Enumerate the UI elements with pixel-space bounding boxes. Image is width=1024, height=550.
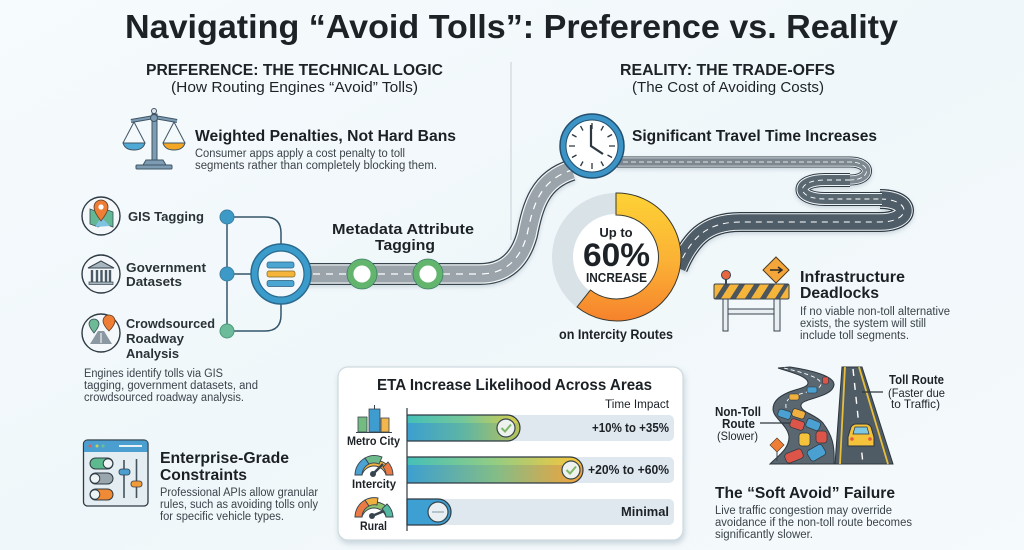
donut chart: up to 60%: INCREASE [586, 270, 647, 285]
label: significant travel time increases: Significant Travel Time Increases [632, 128, 877, 145]
label: crowdsourced roadway analysis [126, 316, 215, 361]
label: non-toll route: Route [722, 417, 755, 431]
label: on intercity routes: on Intercity Routes [559, 327, 673, 342]
text block: engines identify tolls: tagging, government datasets, and [84, 380, 258, 392]
text block: enterprise-grade constraints: rules, such as avoiding tolls only [160, 499, 318, 511]
text block: enterprise-grade constraints [160, 450, 318, 523]
column label: Time Impact [605, 399, 670, 411]
chart title: ETA Increase Likelihood Across Areas [377, 377, 652, 394]
icon: settings window [84, 440, 148, 506]
title: Navigating “Avoid Tolls”: Preference vs. Reality [125, 8, 899, 45]
chart axis [406, 408, 408, 531]
text block: infrastructure deadlocks: Infrastructure [800, 269, 905, 286]
icon: balance scales [123, 108, 185, 169]
text block: soft avoid failure: The “Soft Avoid” Failure [715, 485, 895, 502]
icon: metro city [347, 405, 401, 448]
text block: infrastructure deadlocks: Deadlocks [800, 285, 879, 302]
road: winding route [615, 162, 904, 268]
label: metadata attribute tagging [332, 222, 474, 254]
text block: weighted penalties: Consumer apps apply a cost penalty to toll [195, 148, 405, 160]
text block: infrastructure deadlocks: exists, the system will still [800, 318, 926, 330]
icon: rural gauge: Rural [360, 521, 387, 533]
label: government datasets: Datasets [126, 274, 182, 289]
heading: preference [146, 62, 443, 96]
bar: rural [407, 499, 674, 525]
icon: clock [560, 114, 624, 178]
label: crowdsourced roadway analysis: Roadway [126, 331, 185, 346]
heading: reality: REALITY: THE TRADE-OFFS [620, 62, 835, 79]
icon: GIS map pin [82, 197, 120, 235]
road markers [347, 259, 443, 289]
icon: intercity gauge [352, 456, 397, 491]
text block: soft avoid failure: avoidance if the non-toll route becomes [715, 517, 912, 529]
illustration: non-toll route with traffic [770, 367, 834, 464]
label: non-toll route: (Slower) [717, 429, 758, 443]
text block: weighted penalties [195, 128, 456, 172]
heading: preference: PREFERENCE: THE TECHNICAL LOGIC [146, 62, 443, 79]
icon: crowdsourced road [82, 314, 120, 352]
label: toll route: (Faster due [888, 386, 945, 400]
label: crowdsourced roadway analysis: Crowdsourced [126, 316, 215, 331]
icon: intercity gauge: Intercity [352, 479, 397, 491]
icon: rural gauge [355, 498, 393, 533]
bar: intercity [407, 457, 674, 483]
icon: road barrier [714, 257, 789, 331]
donut chart: up to 60%: Up to [599, 225, 633, 240]
donut chart: up to 60%: 60% [583, 237, 650, 273]
label: government datasets [126, 260, 207, 289]
label: toll route: Toll Route [889, 373, 944, 387]
text block: enterprise-grade constraints: Constraints [160, 467, 247, 484]
label: metadata attribute tagging: Tagging [375, 238, 435, 254]
text block: infrastructure deadlocks: If no viable non-toll alternative [800, 306, 950, 318]
heading: preference: (How Routing Engines “Avoid” Tolls) [171, 79, 418, 96]
icon: metadata hub [251, 244, 311, 304]
label: non-toll route [715, 405, 790, 443]
label: GIS tagging: GIS Tagging [128, 209, 204, 224]
donut chart: up to 60% [562, 193, 681, 321]
label: toll route [862, 373, 945, 411]
text block: engines identify tolls [84, 368, 258, 404]
label: non-toll route: Non-Toll [715, 405, 761, 419]
heading: reality [620, 62, 835, 96]
text block: infrastructure deadlocks: include toll segments. [800, 330, 909, 342]
bar: intercity: +20% to +60% [588, 462, 669, 477]
label: crowdsourced roadway analysis: Analysis [126, 346, 179, 361]
connector nodes [220, 210, 281, 338]
text block: engines identify tolls: crowdsourced roadway analysis. [84, 392, 244, 404]
text block: enterprise-grade constraints: Professional APIs allow granular [160, 487, 318, 499]
label: toll route: to Traffic) [891, 397, 940, 411]
label: metadata attribute tagging: Metadata Attribute [332, 222, 474, 238]
icon: government building [82, 255, 120, 293]
icon: metro city: Metro City [347, 436, 401, 448]
bar: metro city [407, 415, 674, 441]
illustration: toll route [835, 367, 893, 464]
heading: reality: (The Cost of Avoiding Costs) [632, 79, 824, 96]
text block: engines identify tolls: Engines identify tolls via GIS [84, 368, 223, 380]
text block: enterprise-grade constraints: Enterprise-Grade [160, 450, 289, 467]
text block: infrastructure deadlocks [800, 269, 950, 342]
bar: rural: Minimal [621, 504, 669, 519]
road: hub to clock [300, 170, 572, 274]
text block: weighted penalties: Weighted Penalties, Not Hard Bans [195, 128, 456, 145]
label: government datasets: Government [126, 260, 207, 275]
panel: ETA likelihood chart [338, 367, 683, 540]
text block: enterprise-grade constraints: for specific vehicle types. [160, 511, 284, 523]
text block: soft avoid failure: Live traffic congestion may override [715, 505, 892, 517]
text block: soft avoid failure [715, 485, 912, 541]
text block: weighted penalties: segments rather than completely blocking them. [195, 160, 437, 172]
text block: soft avoid failure: significantly slower. [715, 529, 813, 541]
bar: metro city: +10% to +35% [592, 420, 669, 435]
